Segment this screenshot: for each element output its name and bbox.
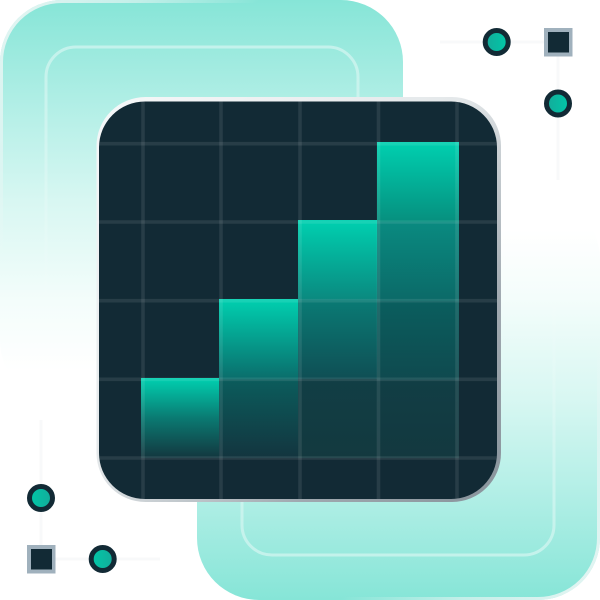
panel edge highlight: bottom right <box>198 198 598 598</box>
node: circle left <box>30 486 52 510</box>
main dark tile <box>96 97 501 502</box>
node: square top right <box>544 28 572 56</box>
connector lines: top right <box>440 42 558 180</box>
node: square bottom left <box>27 545 56 574</box>
background panel: bottom right <box>197 197 600 600</box>
grid lines <box>98 98 500 502</box>
panel edge highlight: top left <box>2 2 402 402</box>
node: circle bottom <box>91 548 114 570</box>
connector lines: bottom left <box>41 420 160 559</box>
background panel: top left <box>0 0 403 403</box>
inner outline: bottom right <box>242 243 554 555</box>
inner outline: top left <box>46 47 358 359</box>
node: circle right <box>546 92 570 115</box>
node: circle top <box>485 30 508 54</box>
bar chart: rising bars <box>141 142 459 458</box>
